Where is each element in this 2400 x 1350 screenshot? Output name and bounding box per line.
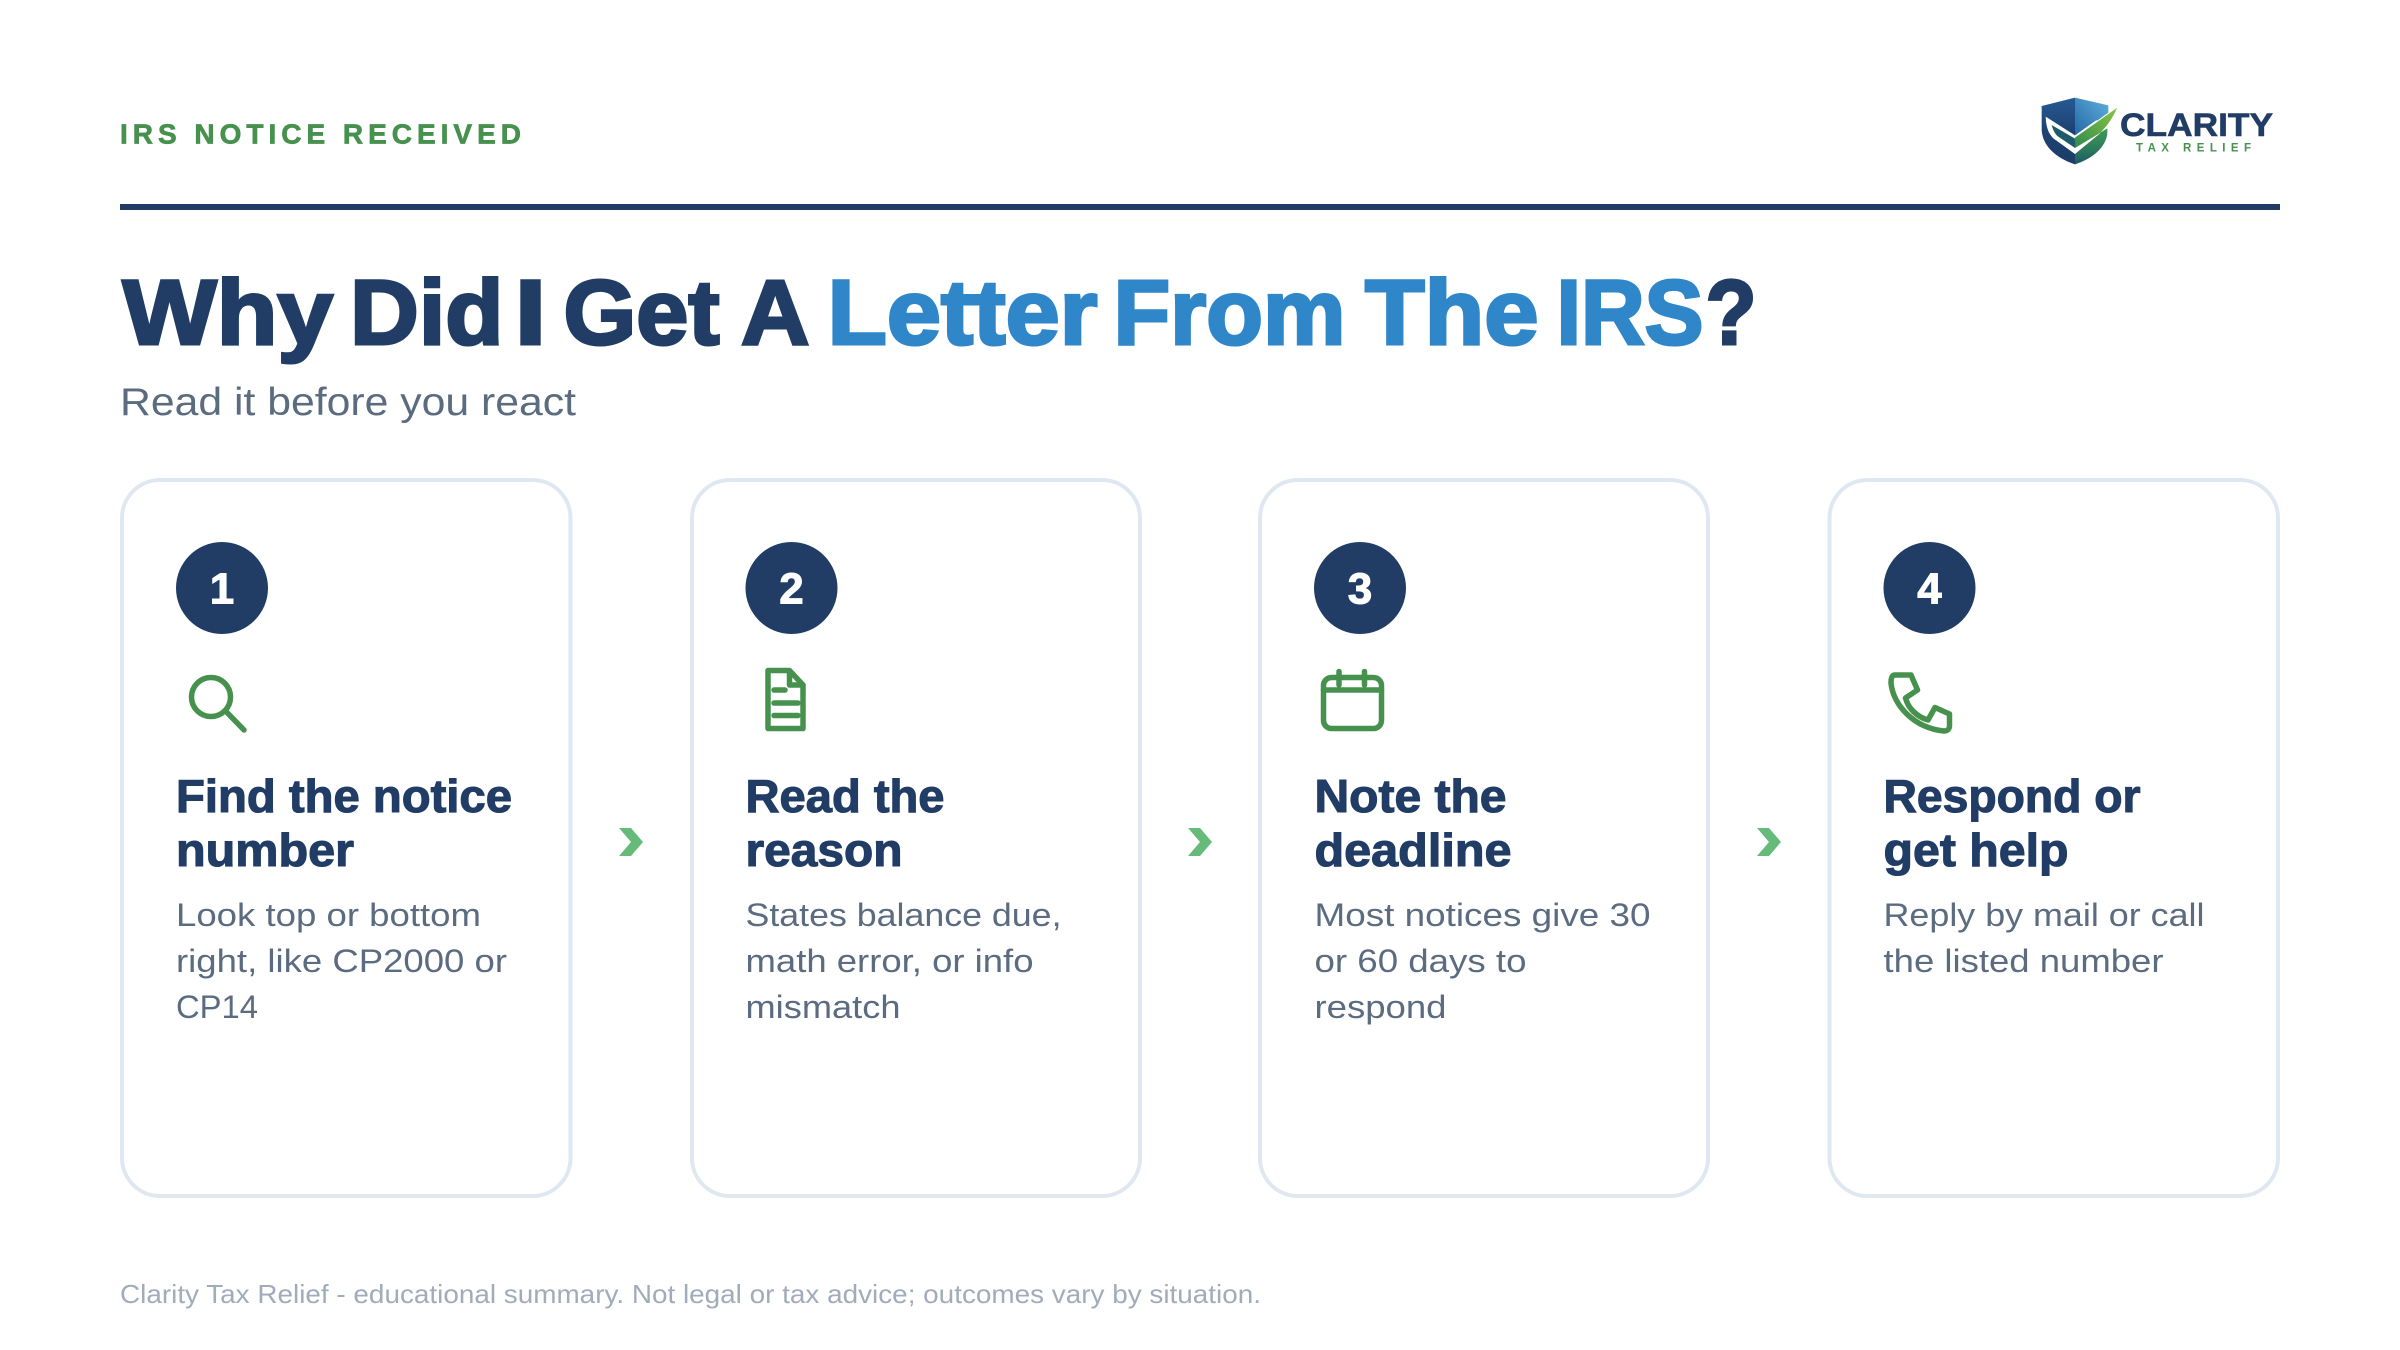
step 3 description [1314,897,1650,1025]
card outline [1830,480,2278,1196]
icon: phone [1891,675,1950,731]
header rule [120,204,2280,210]
number badge 3: 3 [1348,564,1372,614]
number badge 2: 2 [779,564,804,614]
title: ? [1706,262,1756,364]
step 1 description [176,897,507,1025]
card outline [1260,480,1708,1196]
number badge 3 [1314,542,1406,634]
step 4 description: the listed number [1884,943,2164,979]
title: Get [564,262,720,364]
step 3 description: or 60 days to [1314,943,1526,979]
title: Letter [828,262,1098,364]
panel: step 2 read the reason [692,480,1140,1196]
step 4 heading: Respond or [1884,770,2141,822]
step 1 description: CP14 [176,989,258,1025]
logo wordmark: CLARITY [2120,107,2273,143]
arrow 1 to 2 [619,828,643,856]
step 3 description: Most notices give 30 [1314,897,1650,933]
card outline [692,480,1140,1196]
title: IRS [1556,262,1704,364]
step 3 heading: Note the [1314,770,1506,822]
step 1 description: Look top or bottom [176,897,481,933]
panel: step 1 find the notice number [122,480,570,1196]
step 4 description: Reply by mail or call [1884,897,2204,933]
step 2 description: mismatch [746,989,900,1025]
step 2 description: States balance due, [746,897,1062,933]
card outline [122,480,570,1196]
number badge 1 [176,542,268,634]
number badge 4 [1884,542,1976,634]
title [122,262,1756,364]
icon: document [768,670,803,728]
panel: step 3 note the deadline [1260,480,1708,1196]
title: A [741,262,810,364]
title: The [1365,262,1538,364]
title: I [514,262,546,364]
step 3 heading [1314,770,1512,876]
step 4 heading: get help [1884,824,2068,876]
step 4 heading [1884,770,2141,876]
subtitle: Read it before you react [120,381,576,424]
logo: Clarity Tax Relief [2042,98,2273,164]
arrow 3 to 4 [1757,828,1781,856]
icon: magnifying glass [192,678,244,730]
step 1 heading [176,770,512,876]
eyebrow label: IRS NOTICE RECEIVED [120,118,521,150]
logo tagline: TAX RELIEF [2136,142,2251,154]
step 2 heading: reason [746,824,902,876]
step 3 heading: deadline [1314,824,1512,876]
logo shield [2042,98,2117,164]
footer disclaimer: Clarity Tax Relief - educational summary. Not legal or tax advice; outcomes vary by situation. [120,1279,1261,1309]
step 4 description [1884,897,2204,979]
step 1 heading: number [176,824,354,876]
title: Did [350,262,504,364]
step 2 heading [746,770,944,876]
step 2 heading: Read the [746,770,944,822]
title: Why [122,262,333,364]
number badge 4: 4 [1917,564,1942,614]
title: From [1114,262,1346,364]
step 2 description: math error, or info [746,943,1034,979]
icon: calendar [1324,672,1382,728]
panel: step 4 respond or get help [1830,480,2278,1196]
step 3 description: respond [1314,989,1446,1025]
step 1 heading: Find the notice [176,770,512,822]
step 1 description: right, like CP2000 or [176,943,507,979]
number badge 2 [746,542,838,634]
arrow 2 to 3 [1188,828,1212,856]
step 2 description [746,897,1062,1025]
number badge 1: 1 [210,564,234,614]
